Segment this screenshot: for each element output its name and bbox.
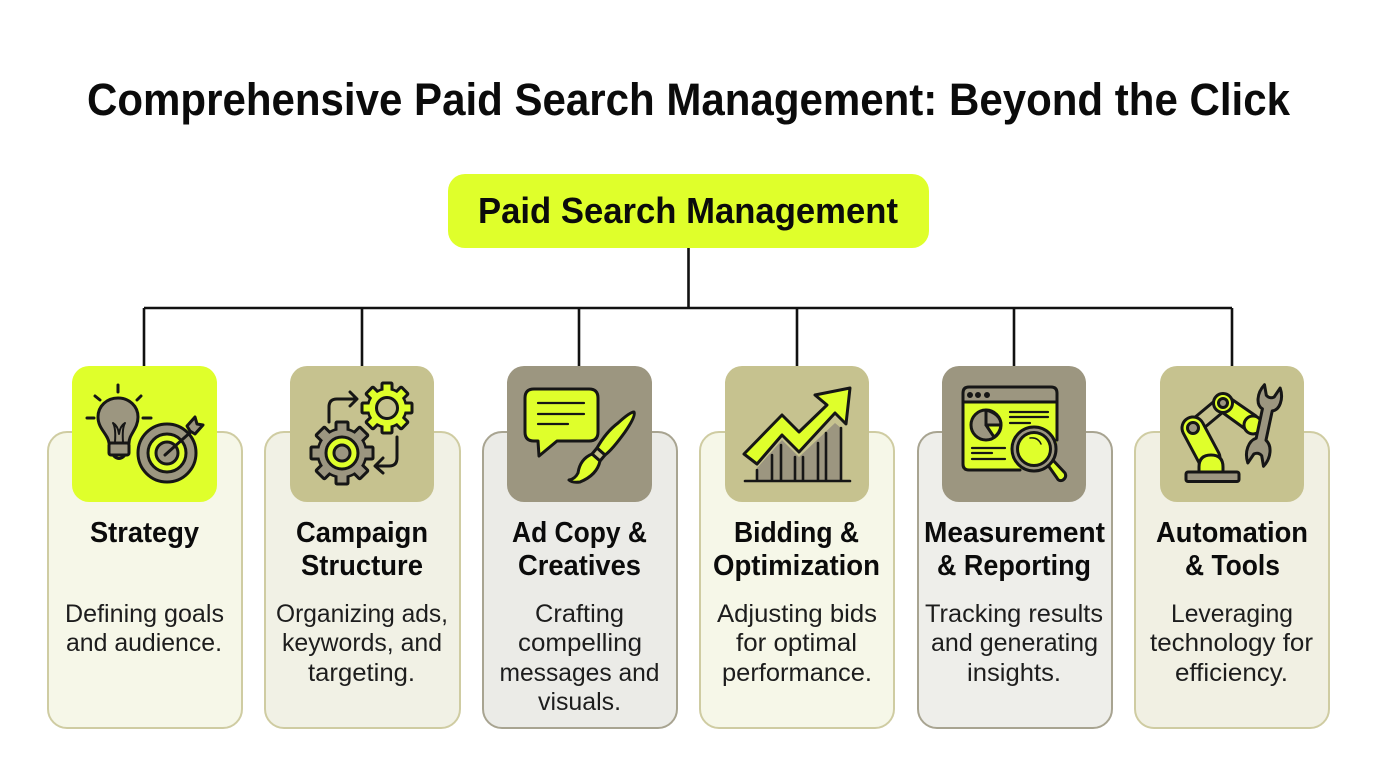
icon: robot arm and wrench [1186, 384, 1284, 482]
description: Campaign Structure: Organizing ads, [276, 600, 448, 628]
root node: Paid Search Management [448, 174, 929, 248]
icon tile: campaign structure [290, 366, 434, 502]
heading: Automation & Tools [1156, 517, 1308, 582]
icon: dashboard window with magnifier [963, 387, 1066, 481]
heading: Measurement & Reporting: Measurement [924, 517, 1105, 549]
description: Automation & Tools [1150, 600, 1313, 687]
description: Strategy: Defining goals [65, 600, 224, 628]
description: Measurement & Reporting [925, 600, 1103, 687]
description: Bidding & Optimization [717, 600, 877, 687]
panel: Strategy [48, 366, 242, 728]
panel: Campaign Structure [265, 366, 460, 728]
description: Strategy: and audience. [66, 629, 222, 657]
description: Ad Copy & Creatives: visuals. [538, 688, 621, 716]
description: Strategy [65, 600, 224, 657]
description: Measurement & Reporting: insights. [967, 659, 1061, 687]
description: Bidding & Optimization: for optimal [736, 629, 857, 657]
icon tile: automation [1160, 366, 1304, 502]
heading: Bidding & Optimization [713, 517, 880, 582]
panel: Ad Copy & Creatives [483, 366, 677, 728]
description: Campaign Structure [276, 600, 448, 687]
icon: rising trend arrow over bars [744, 388, 850, 481]
heading: Automation & Tools: Automation [1156, 517, 1308, 549]
icon tile: ad copy [507, 366, 652, 502]
icon: gears and arrows [311, 383, 412, 484]
description: Bidding & Optimization: Adjusting bids [717, 600, 877, 628]
description: Ad Copy & Creatives: compelling [518, 629, 642, 657]
icon tile: measurement [942, 366, 1086, 502]
icon tile: strategy [72, 366, 217, 502]
description: Measurement & Reporting: and generating [931, 629, 1098, 657]
heading: Campaign Structure: Structure [301, 550, 423, 582]
description: Bidding & Optimization: performance. [722, 659, 872, 687]
panel: Measurement & Reporting [918, 366, 1112, 728]
heading: Automation & Tools: & Tools [1185, 550, 1280, 582]
heading: Strategy: Strategy [90, 517, 199, 549]
description: Ad Copy & Creatives [500, 600, 660, 716]
heading: Measurement & Reporting: & Reporting [937, 550, 1091, 582]
heading: Ad Copy & Creatives: Ad Copy & [512, 517, 647, 549]
heading: Ad Copy & Creatives: Creatives [518, 550, 641, 582]
title: Comprehensive Paid Search Management: Beyond the Click [87, 74, 1291, 125]
panel: Automation & Tools [1135, 366, 1329, 728]
description: Ad Copy & Creatives: Crafting [535, 600, 624, 628]
heading: Ad Copy & Creatives [512, 517, 647, 582]
description: Ad Copy & Creatives: messages and [500, 659, 660, 687]
description: Automation & Tools: technology for [1150, 629, 1313, 657]
description: Measurement & Reporting: Tracking results [925, 600, 1103, 628]
icon tile: bidding [725, 366, 869, 502]
heading: Campaign Structure [296, 517, 428, 582]
panel: Bidding & Optimization [700, 366, 894, 728]
heading: Bidding & Optimization: Optimization [713, 550, 880, 582]
heading: Bidding & Optimization: Bidding & [734, 517, 859, 549]
heading: Campaign Structure: Campaign [296, 517, 428, 549]
description: Campaign Structure: keywords, and [282, 629, 442, 657]
heading: Measurement & Reporting [924, 517, 1105, 582]
description: Campaign Structure: targeting. [308, 659, 415, 687]
icon: light bulb and target [87, 385, 203, 482]
root node: Paid Search Management: Paid Search Management [478, 190, 898, 231]
description: Automation & Tools: efficiency. [1175, 659, 1288, 687]
description: Automation & Tools: Leveraging [1171, 600, 1293, 628]
connector lines [144, 248, 1232, 366]
icon: speech bubble and paintbrush [525, 389, 634, 482]
